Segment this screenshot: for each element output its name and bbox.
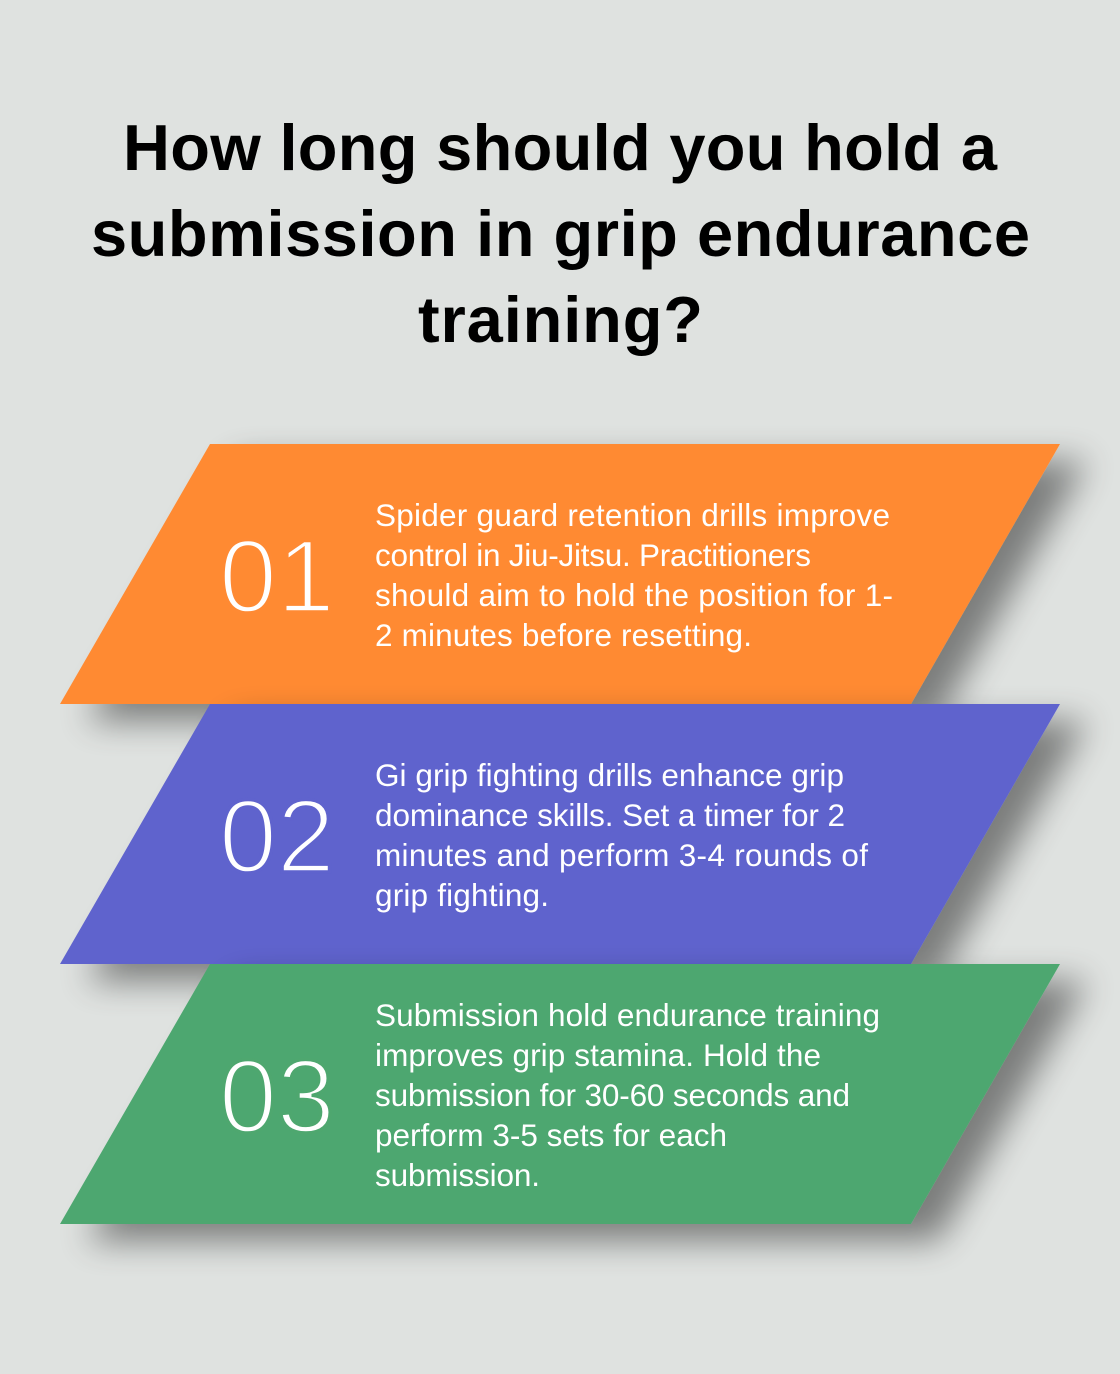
text block: step 03: submission for 30-60 seconds and [375, 1077, 850, 1113]
text block: step 01: Spider guard retention drills improve [375, 497, 890, 533]
text block: step 02: Gi grip fighting drills enhance grip [375, 757, 844, 793]
text block: step 02 [375, 757, 868, 913]
title [91, 111, 1030, 356]
text block: step 03: submission. [375, 1157, 540, 1193]
text block: step 03 [375, 997, 880, 1193]
text block: step 01: should aim to hold the position for 1- [375, 577, 893, 613]
panel: step 01 [60, 444, 1060, 704]
number 03: 03 [219, 1039, 335, 1155]
panel: step 02 [60, 704, 1060, 964]
text block: step 03: Submission hold endurance training [375, 997, 880, 1033]
title: How long should you hold a [123, 111, 998, 184]
number 02: 02 [219, 779, 335, 895]
text block: step 01: control in Jiu-Jitsu. Practitioners [375, 537, 811, 573]
title: training? [418, 283, 703, 356]
text block: step 02: dominance skills. Set a timer for 2 [375, 797, 845, 833]
text block: step 03: improves grip stamina. Hold the [375, 1037, 821, 1073]
text block: step 01 [375, 497, 893, 653]
text block: step 02: grip fighting. [375, 877, 549, 913]
number 01: 01 [219, 519, 335, 635]
parallelogram: green [60, 964, 1060, 1224]
parallelogram: purple [60, 704, 1060, 964]
text block: step 01: 2 minutes before resetting. [375, 617, 752, 653]
text block: step 02: minutes and perform 3-4 rounds of [375, 837, 868, 873]
parallelogram: orange [60, 444, 1060, 704]
text block: step 03: perform 3-5 sets for each [375, 1117, 727, 1153]
panel: step 03 [60, 964, 1060, 1224]
title: submission in grip endurance [91, 197, 1030, 270]
